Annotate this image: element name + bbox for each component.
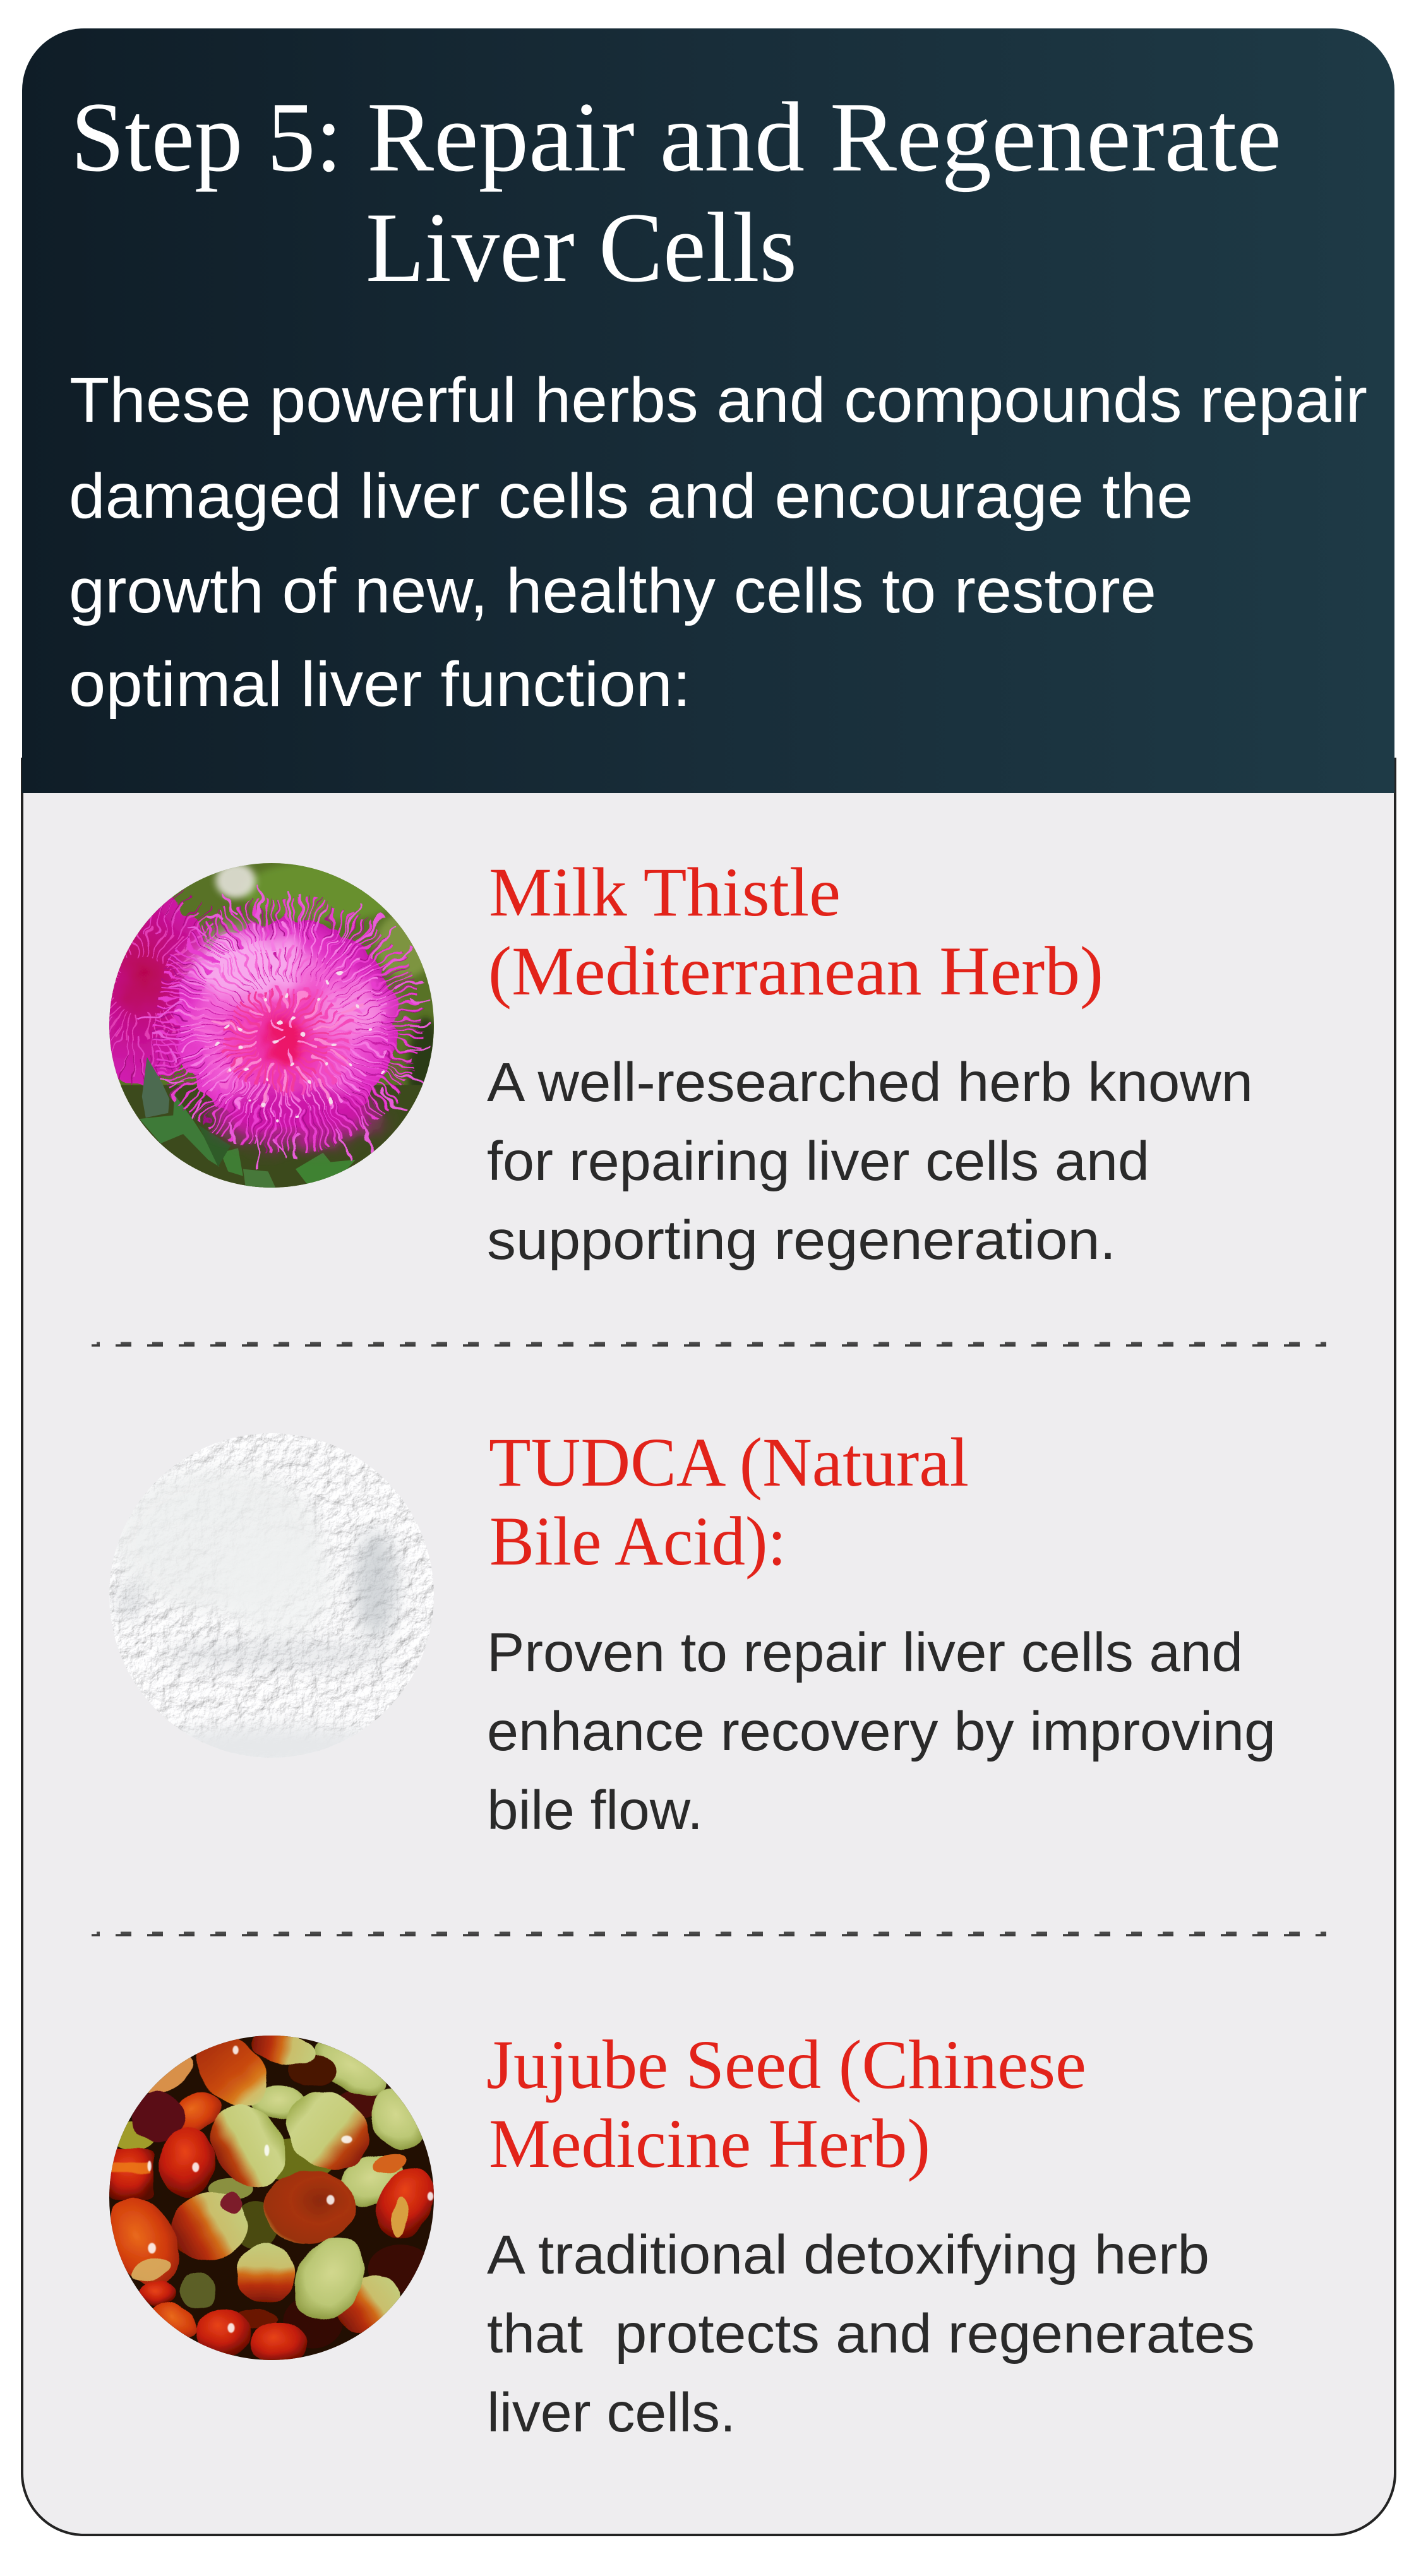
description: milk thistle: for repairing liver cells and (487, 1131, 1149, 1192)
heading: jujube seed (486, 2026, 1086, 2182)
description: jujube seed: liver cells. (487, 2382, 736, 2443)
fruit highlights (147, 2046, 433, 2333)
description: milk thistle (487, 1052, 1253, 1271)
description: jujube seed (487, 2224, 1255, 2443)
title: Repair and Regenerate (367, 82, 1281, 193)
description: milk thistle: supporting regeneration. (487, 1210, 1116, 1271)
heading: TUDCA: TUDCA (Natural (489, 1424, 969, 1501)
image: jujube fruits (109, 2036, 434, 2360)
dashed divider one (92, 1344, 1326, 1345)
heading: milk thistle: (Mediterranean Herb) (488, 933, 1103, 1010)
text block: TUDCA (487, 1424, 1276, 1841)
heading: milk thistle (488, 854, 1103, 1010)
jujube fruit pile (109, 2036, 434, 2360)
description: TUDCA: enhance recovery by improving (487, 1701, 1276, 1762)
text block: jujube seed (486, 2026, 1255, 2443)
image: TUDCA white powder (109, 1433, 434, 1769)
main bloom (141, 888, 431, 1164)
panel: ingredients card body (22, 759, 1395, 2535)
header intro text: growth of new, healthy cells to restore (69, 556, 1156, 626)
description: TUDCA (487, 1622, 1276, 1841)
image: milk thistle flower (109, 863, 434, 1188)
heading: TUDCA: Bile Acid): (489, 1503, 786, 1580)
left background bloom (109, 890, 231, 1086)
heading: milk thistle: Milk Thistle (489, 854, 841, 931)
text block: milk thistle (487, 854, 1253, 1271)
dashed divider two (92, 1933, 1326, 1935)
title: Liver Cells (366, 193, 797, 303)
header intro text (69, 365, 1367, 720)
header intro text: These powerful herbs and compounds repair (69, 365, 1367, 436)
heading: TUDCA (489, 1424, 969, 1580)
panel: dark gradient header (22, 28, 1394, 793)
header intro text: optimal liver function: (69, 649, 691, 720)
description: milk thistle: A well-researched herb known (487, 1052, 1253, 1113)
heading: jujube seed: Medicine Herb) (489, 2105, 930, 2182)
heading: jujube seed: Jujube Seed (Chinese (486, 2026, 1086, 2103)
header intro text: damaged liver cells and encourage the (69, 461, 1193, 532)
description: TUDCA: Proven to repair liver cells and (487, 1622, 1243, 1683)
title: Step 5: (71, 82, 342, 193)
description: jujube seed: that protects and regenerates (487, 2303, 1255, 2364)
title (71, 82, 1281, 303)
description: TUDCA: bile flow. (487, 1780, 703, 1841)
thistle leaves (140, 1057, 356, 1188)
description: jujube seed: A traditional detoxifying herb (487, 2224, 1209, 2286)
